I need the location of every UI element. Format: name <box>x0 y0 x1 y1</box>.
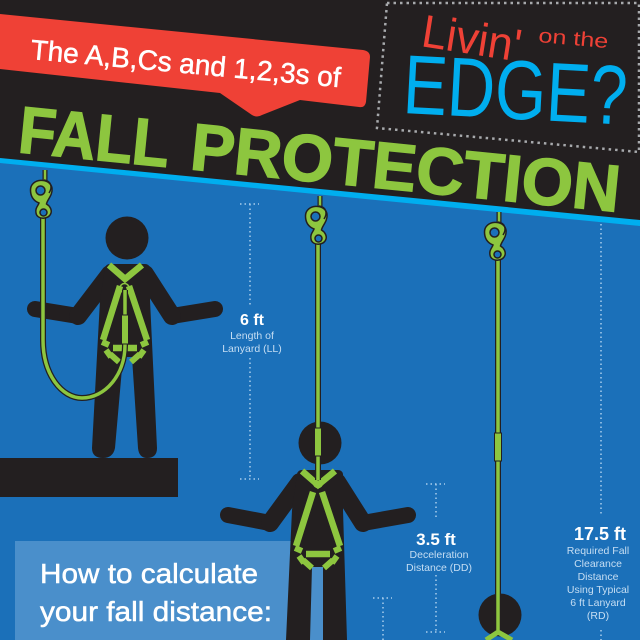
harness <box>102 265 148 362</box>
blue field <box>0 159 640 640</box>
shock pack <box>494 433 502 461</box>
snap hook <box>484 212 506 260</box>
handwritten: on the: on the <box>538 25 609 53</box>
title: FALL PROTECTION: FALL <box>16 92 173 181</box>
callout panel <box>15 541 325 640</box>
label: deceleration distance: Distance (DD) <box>406 562 472 574</box>
callout heading: How to calculate <box>40 558 258 589</box>
red banner <box>0 14 370 116</box>
label: 6 ft: 6 ft <box>240 312 265 329</box>
label: length of lanyard: Length of <box>230 330 274 342</box>
dimension: required clearance <box>567 224 629 640</box>
dimension: lanyard length <box>222 204 282 479</box>
title: FALL PROTECTION <box>16 92 624 226</box>
platform <box>0 458 178 497</box>
shock pack <box>314 428 322 456</box>
head <box>298 422 342 464</box>
snap hook <box>30 170 52 218</box>
lanyard: deployed <box>495 256 501 630</box>
dimension: harness stretch <box>373 598 392 640</box>
dotted box: Livin' on the Edge <box>377 3 639 152</box>
label: required fall clearance: (RD) <box>587 610 609 622</box>
label: required fall clearance: Required Fall <box>567 545 629 557</box>
label: length of lanyard: Lanyard (LL) <box>222 343 282 355</box>
shoulder straps <box>486 632 512 640</box>
arms <box>228 515 408 523</box>
label: required fall clearance: Clearance <box>574 558 622 570</box>
label: deceleration distance: Deceleration <box>410 549 469 561</box>
harness <box>295 471 341 568</box>
head <box>478 594 522 636</box>
snap hook <box>306 196 327 244</box>
title: FALL PROTECTION: PROTECTION <box>188 109 624 226</box>
figure 2: mid-fall <box>228 196 408 640</box>
banner text: The A,B,Cs and 1,2,3s of <box>29 34 342 93</box>
cyan divider band <box>0 158 640 226</box>
label: required fall clearance: Distance <box>578 571 619 583</box>
lanyard: taut <box>315 240 321 480</box>
label: 3.5 ft: 3.5 ft <box>416 530 456 549</box>
label: 17.5 ft: 17.5 ft <box>574 524 626 544</box>
callout heading <box>40 558 272 627</box>
dimension: deceleration distance <box>406 484 472 632</box>
lanyard: slack <box>43 214 125 398</box>
head <box>106 216 148 260</box>
handwritten: Livin': Livin' <box>418 5 525 72</box>
torso and legs <box>92 264 157 458</box>
label: required fall clearance: Using Typical <box>567 584 629 596</box>
callout heading: your fall distance: <box>40 596 272 627</box>
label: required fall clearance: 6 ft Lanyard <box>570 597 626 609</box>
arms <box>35 309 215 316</box>
torso and legs <box>286 470 347 640</box>
figure 1: worker on platform <box>0 170 215 497</box>
shock pack <box>122 315 128 344</box>
figure 3: full deployment <box>478 212 522 640</box>
